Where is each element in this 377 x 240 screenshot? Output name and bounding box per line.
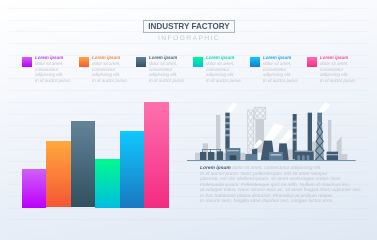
description text: malesuada ipsum. Pellentesque quis mi nibh. Nullam id maximus leo,	[200, 183, 350, 188]
bar: blue	[120, 131, 144, 208]
legend item: pink: Lorem ipsum	[320, 55, 348, 60]
legend item: green	[193, 55, 242, 83]
legend item: orange: dolor sit amet,	[92, 61, 120, 66]
legend item: green: In id auctor purus.	[206, 78, 242, 83]
legend item: pink: consectetur	[320, 67, 343, 72]
description text: placerat, est nisl eleifend ipsum, sit amet scelerisque metus risus	[200, 177, 341, 182]
description text: In hac habitasse platea dictumst. Phasellus at pretium neque.	[200, 194, 333, 199]
lattice towers	[248, 107, 266, 153]
legend item: blue: Lorem ipsum	[263, 55, 291, 60]
legend item: purple: Lorem ipsum	[35, 55, 63, 60]
legend item: blue	[250, 55, 299, 83]
legend item: pink: dolor sit amet,	[320, 61, 348, 66]
legend item: slate: In id auctor purus.	[149, 78, 185, 83]
description text: In id auctor purus. Nunc pellentesque, nisl sit amet semper	[200, 172, 327, 177]
legend item: slate	[136, 55, 185, 83]
title: INDUSTRY FACTORY	[148, 22, 230, 31]
title	[143, 20, 235, 33]
smoke	[227, 102, 330, 149]
legend item: blue: dolor sit amet,	[263, 61, 291, 66]
legend item: green: adipiscing elit.	[206, 72, 234, 77]
subtitle: INFOGRAPHIC	[158, 34, 220, 42]
legend item: orange: Lorem ipsum	[92, 55, 120, 60]
legend item: green: consectetur	[206, 67, 229, 72]
bar: slate	[71, 121, 95, 207]
tower	[317, 113, 322, 123]
legend item: pink	[307, 55, 356, 83]
bar: green	[95, 159, 120, 208]
legend item: green: dolor sit amet,	[206, 61, 234, 66]
bar: pink	[144, 102, 169, 208]
legend item: slate: adipiscing elit.	[149, 72, 177, 77]
legend item: purple: dolor sit amet,	[35, 61, 63, 66]
legend item: blue: In id auctor purus.	[263, 78, 299, 83]
legend item: green: Lorem ipsum	[206, 55, 234, 60]
legend item: slate: Lorem ipsum	[149, 55, 177, 60]
bar chart	[22, 102, 169, 208]
legend item: pink: In id auctor purus.	[320, 78, 356, 83]
description text: In mauris sem, fringilla vitae dapibus nec, congue luctus eros.	[200, 199, 333, 204]
legend item: purple: In id auctor purus.	[35, 78, 71, 83]
legend item: orange: adipiscing elit.	[92, 72, 120, 77]
description text	[200, 166, 362, 204]
legend item: purple: adipiscing elit.	[35, 72, 63, 77]
chimneys	[200, 113, 312, 160]
description text: Lorem ipsum dolor sit amet, consectetur adipiscing elit.	[200, 166, 322, 171]
background buildings	[195, 115, 347, 160]
factory blocks	[226, 148, 240, 160]
legend item: blue: adipiscing elit.	[263, 72, 291, 77]
ground line	[187, 160, 356, 161]
legend item: orange	[79, 55, 128, 83]
bar: purple	[22, 169, 46, 208]
description text: at volutpat tellus. Nunc ornare eros ac, sit amet feugiat risus vulputate nec.	[200, 188, 362, 193]
factory illustration	[187, 102, 356, 161]
legend item: slate: consectetur	[149, 67, 172, 72]
legend item: purple	[22, 55, 71, 83]
legend item: orange: consectetur	[92, 67, 115, 72]
legend item: orange: In id auctor purus.	[92, 78, 128, 83]
legend item: blue: consectetur	[263, 67, 286, 72]
bar: orange	[46, 141, 71, 207]
legend item: slate: dolor sit amet,	[149, 61, 177, 66]
legend item: pink: adipiscing elit.	[320, 72, 348, 77]
legend item: purple: consectetur	[35, 67, 58, 72]
